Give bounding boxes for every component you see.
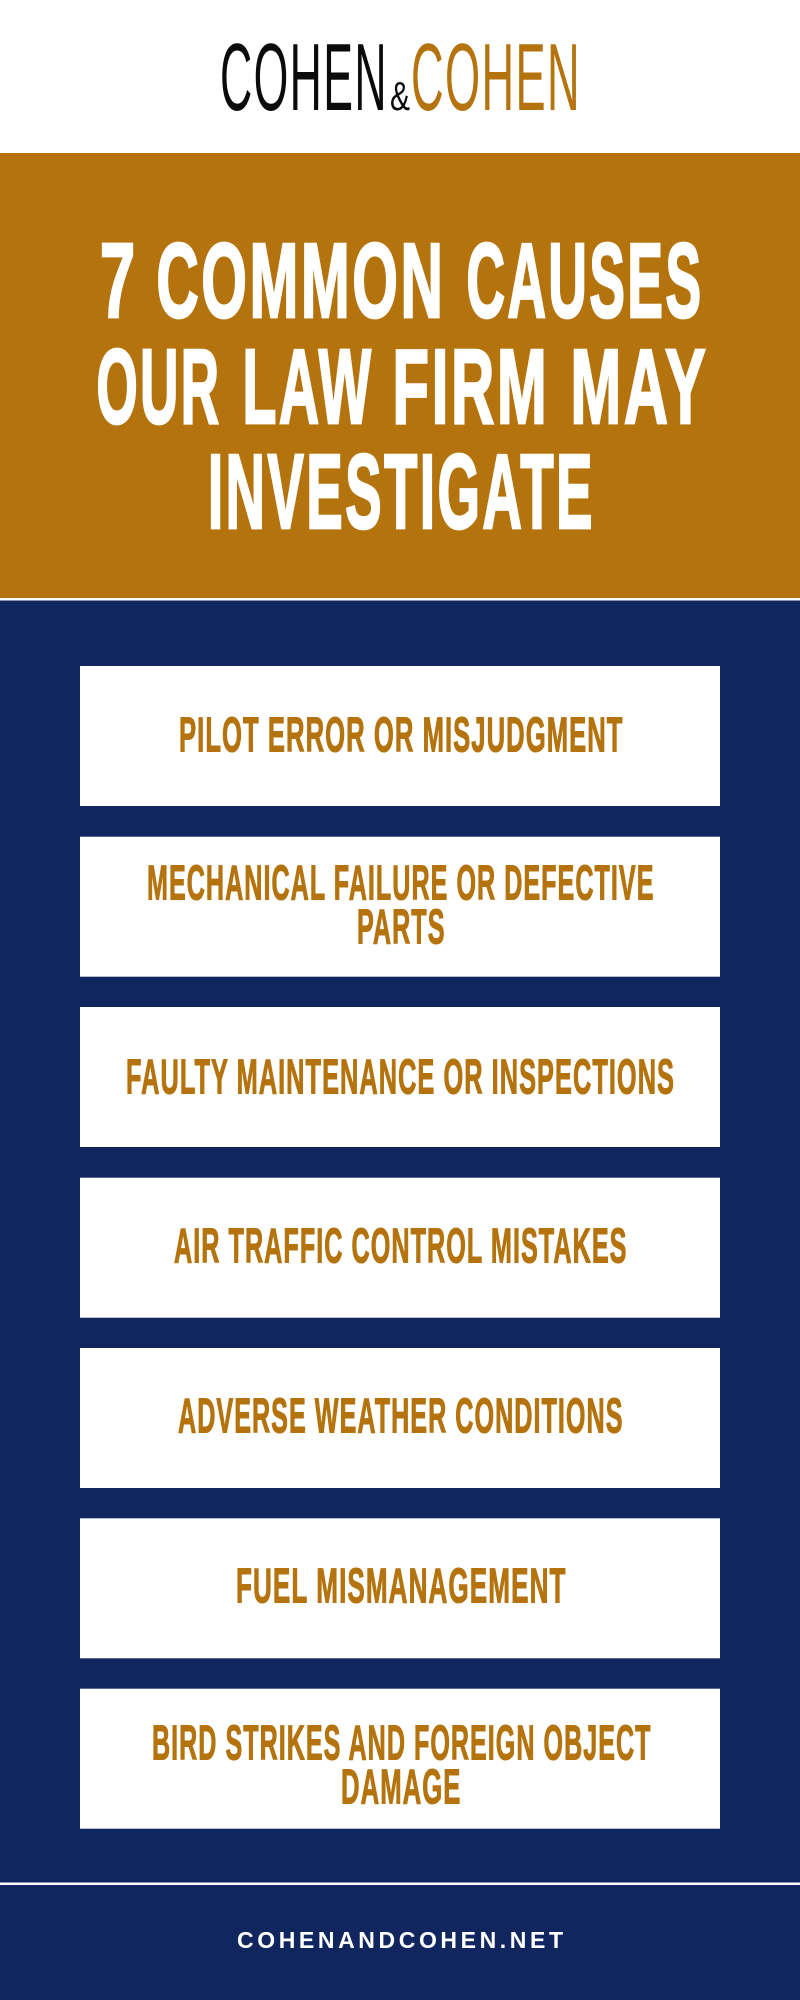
cause 7 [80,1689,720,1829]
logo: Cohen & Cohen: COHEN [411,24,581,131]
title banner: 7 [100,222,138,340]
cause 4 [80,1178,720,1318]
cause 6 [80,1518,720,1658]
panel: causes list [0,598,800,2000]
cause 7: DAMAGE [341,1760,462,1814]
logo: Cohen & Cohen: & [390,73,410,119]
title banner: OUR [96,328,222,446]
title banner: LAW [242,328,374,446]
cause 5 [80,1348,720,1488]
cause 2: PARTS [357,900,446,954]
logo: Cohen & Cohen: COHEN [220,24,388,131]
footer: COHENANDCOHEN.NET [237,1927,563,1953]
logo: Cohen & Cohen [0,0,800,153]
cause 1 [80,666,720,806]
cause 2 [80,837,720,977]
cause 3 [80,1007,720,1147]
title banner [0,153,800,598]
title banner: FIRM [392,328,550,446]
title banner: COMMON [156,222,446,340]
